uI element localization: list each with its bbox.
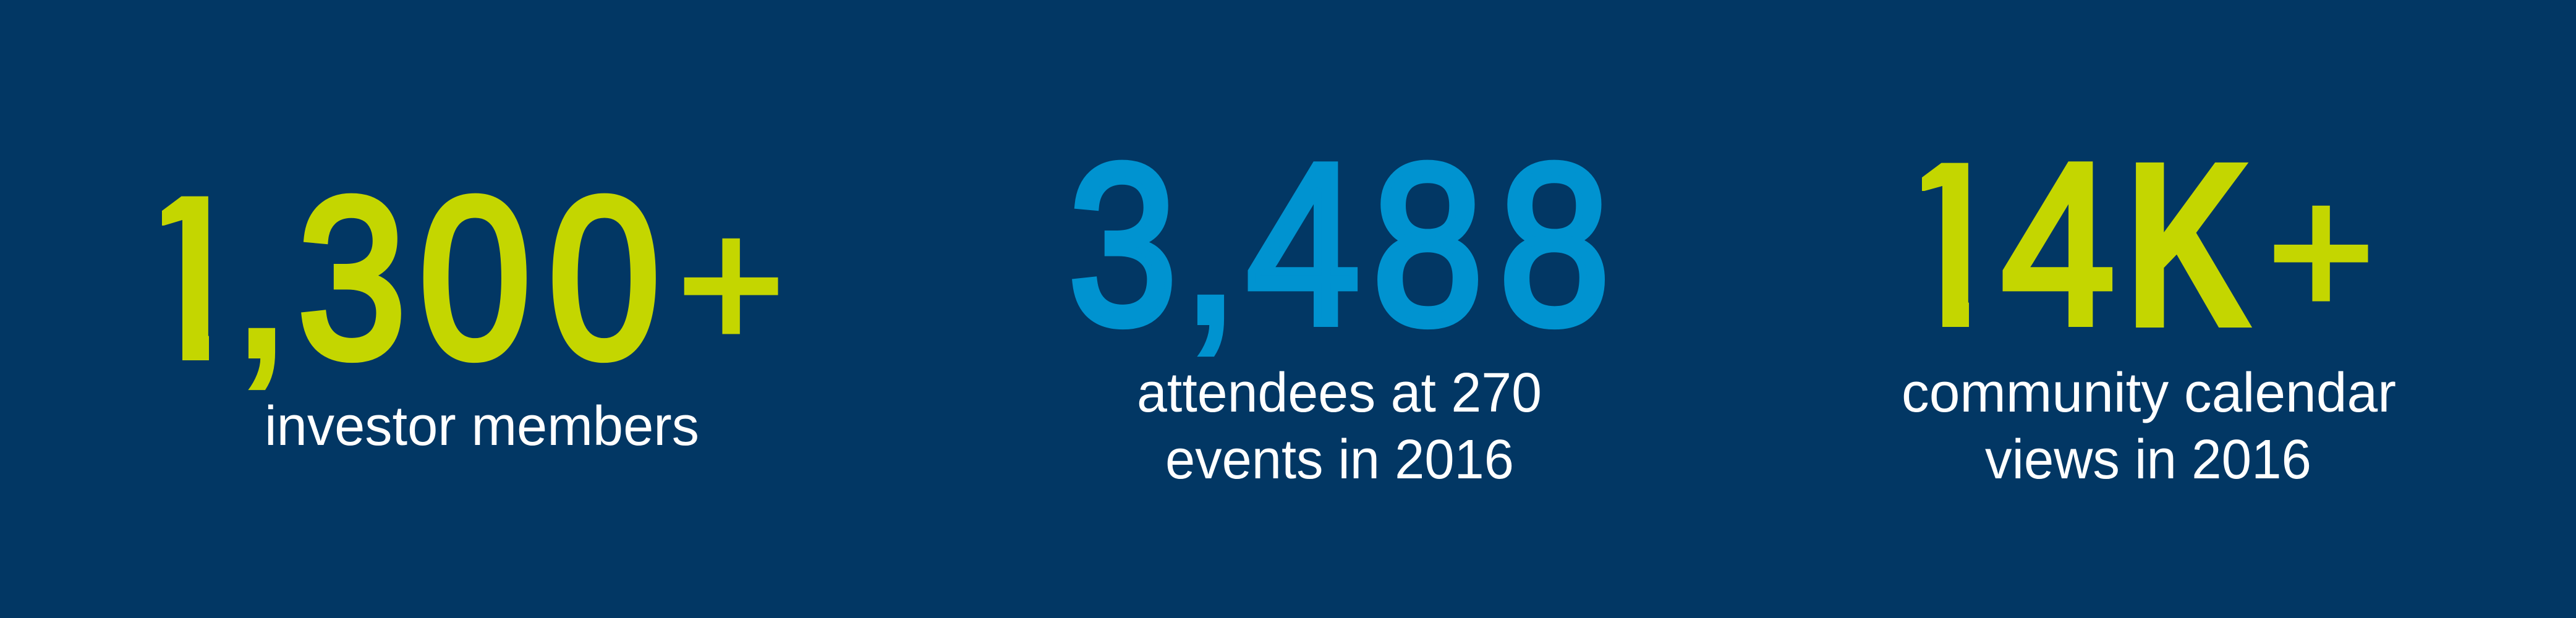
number: 3,488: 3 xyxy=(1068,117,1177,371)
number: 1,300+: 0 xyxy=(419,151,531,405)
number: 1,300+: 0 xyxy=(548,151,660,405)
label: community calendar views in 2016: views in 2016 xyxy=(1985,429,2311,491)
number: 1,300+ xyxy=(162,193,778,391)
number: 3,488: 8 xyxy=(1499,118,1610,372)
stat: attendees at events xyxy=(1068,117,1610,491)
number: 1,300+: 3 xyxy=(298,151,406,405)
label: attendees at 270 events in 2016 xyxy=(1137,362,1542,491)
label: community calendar views in 2016: community calendar xyxy=(1902,362,2396,424)
number: 14K+: K xyxy=(2126,114,2250,375)
label: attendees at 270 events in 2016: events in 2016 xyxy=(1165,429,1514,491)
number: 1,300+: 1 xyxy=(132,145,247,411)
label: community calendar views in 2016 xyxy=(1902,362,2396,491)
number: 1,300+: , xyxy=(236,174,288,402)
stat: community calendar views xyxy=(1904,161,2395,479)
number: 1,300+: + xyxy=(678,180,785,388)
number: 14K+: 1 xyxy=(1892,112,2007,378)
number: 3,488: 8 xyxy=(1372,118,1483,372)
number: 14K+: 4 xyxy=(2002,117,2115,371)
number: 3,488: 4 xyxy=(1247,117,1360,371)
label: investor members: investor members xyxy=(265,396,699,457)
label: attendees at 270 events in 2016: attendees at 270 xyxy=(1137,362,1542,424)
infographic canvas xyxy=(162,159,2395,479)
number: 14K+: + xyxy=(2268,147,2375,355)
number: 14K+ xyxy=(1922,161,2368,328)
number: 3,488: , xyxy=(1184,141,1237,369)
number: 3,488 xyxy=(1068,117,1610,372)
stat: investor members xyxy=(162,193,778,446)
